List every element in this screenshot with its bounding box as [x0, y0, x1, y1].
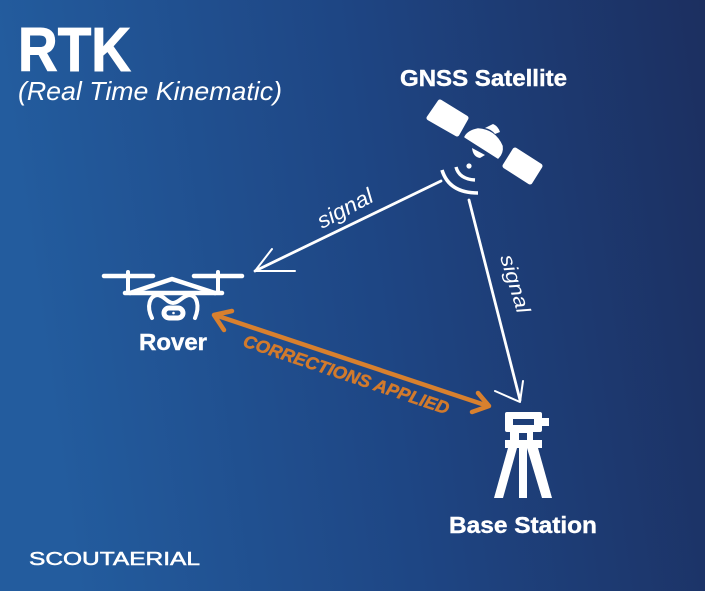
title: RTK [18, 16, 131, 85]
label: signal left: signal [313, 183, 378, 233]
label: Base Station: Base Station [449, 512, 597, 538]
subtitle: (Real Time Kinematic) [18, 76, 282, 106]
label: corrections applied: CORRECTIONS APPLIED [241, 331, 452, 418]
arrow: signal satellite to base station [469, 200, 523, 402]
label: signal right: signal [495, 252, 534, 316]
arrow: signal satellite to rover [255, 181, 441, 271]
logo: Scout Aerial: SCOUTAERIAL [29, 549, 200, 569]
icon: base station tripod [494, 412, 552, 498]
label: GNSS Satellite: GNSS Satellite [400, 65, 567, 91]
icon: satellite [429, 102, 540, 193]
arrow: corrections applied [214, 311, 489, 412]
icon: drone [104, 272, 242, 318]
label: Rover: Rover [139, 329, 207, 355]
